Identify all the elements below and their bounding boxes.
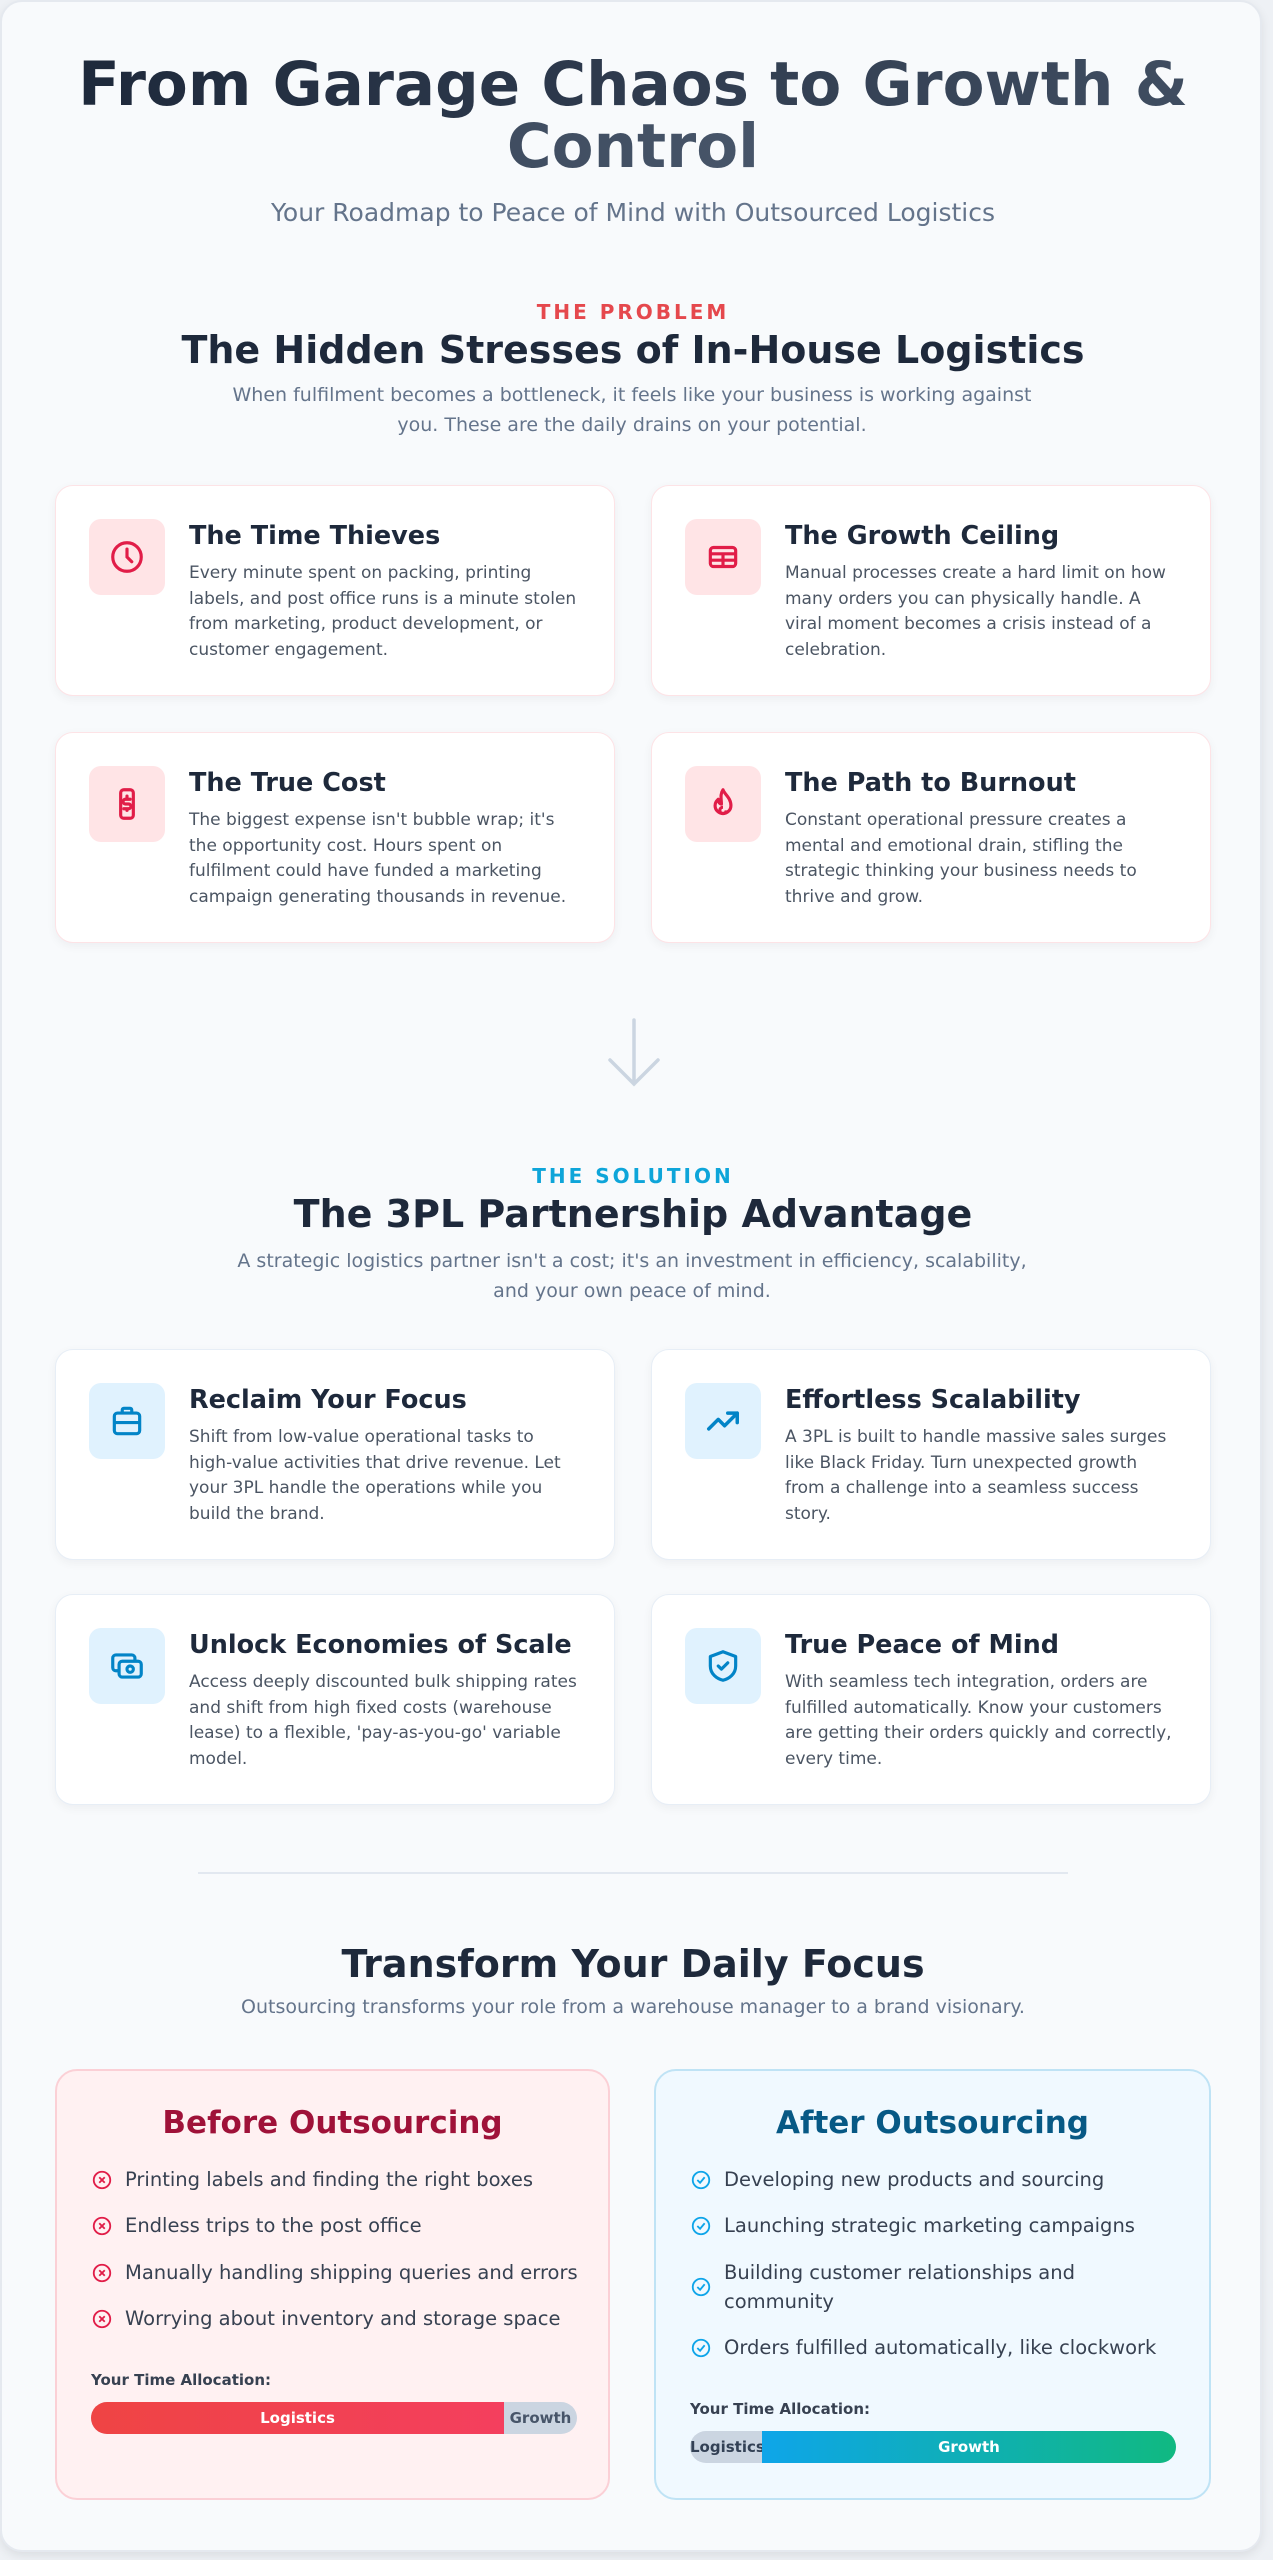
list item: Endless trips to the post office [125,2214,422,2237]
list item: Printing labels and finding the right boxes [125,2168,533,2191]
card: true cost [55,732,615,943]
bar: time allocation after: Logistics [690,2438,765,2456]
card: growth ceiling: The Growth Ceiling [785,521,1059,551]
list item: Building customer relationships and [724,2261,1075,2284]
card: burnout: Constant operational pressure creates a mental and emotional drain, stifling the strategic thinking your business needs to thrive and grow. [785,810,1137,906]
arrow down [608,1018,660,1086]
card: scalability [651,1349,1211,1560]
list item: community [724,2290,834,2313]
panel: before outsourcing: Before Outsourcing [162,2105,503,2141]
card: time thieves [55,485,615,696]
subtitle: Your Roadmap to Peace of Mind with Outsourced Logistics [271,198,995,227]
bar: time allocation before [91,2402,577,2434]
problem description: When fulfilment becomes a bottleneck, it feels like your business is working against you. These are the daily drains on your potential. [233,384,1031,436]
card: peace of mind: With seamless tech integration, orders are fulfilled automatically. Know your customers are getting their orders quickly and correctly, every time. [785,1672,1172,1768]
list item: Developing new products and sourcing [724,2168,1104,2191]
card: reclaim focus [55,1349,615,1560]
heading: solution: The 3PL Partnership Advantage [294,1192,972,1236]
list item [692,2261,1075,2313]
eyebrow: the solution: THE SOLUTION [532,1164,734,1188]
card: scalability: A 3PL is built to handle massive sales surges like Black Friday. Turn unexpected growth from a challenge into a seamless success story. [785,1427,1166,1524]
eyebrow: the problem: THE PROBLEM [537,300,729,324]
card: burnout [651,732,1211,943]
solution description: A strategic logistics partner isn't a cost; it's an investment in efficiency, scalability, and your own peace of mind. [237,1250,1027,1302]
card: economies of scale: Unlock Economies of Scale [189,1630,572,1660]
card: time thieves: Every minute spent on packing, printing labels, and post office runs is a minute stolen from marketing, product development, or customer engagement. [189,563,576,660]
list item: Launching strategic marketing campaigns [724,2214,1135,2237]
icon: clock [89,519,165,595]
icon: flame [685,766,761,842]
card: peace of mind [651,1594,1211,1805]
icon: money [89,766,165,842]
title [78,49,1188,182]
list item: Orders fulfilled automatically, like clockwork [724,2336,1156,2359]
panel: before outsourcing: Your Time Allocation: [91,2371,271,2389]
card: reclaim focus: Reclaim Your Focus [189,1385,467,1415]
card: growth ceiling: Manual processes create a hard limit on how many orders you can physically handle. A viral moment becomes a crisis instead of a celebration. [785,563,1166,660]
panel: after outsourcing [654,2069,1211,2500]
title: Control [507,111,759,182]
card: economies of scale [55,1594,615,1805]
bar: time allocation after: Growth [938,2438,1000,2456]
icon: cash [89,1628,165,1704]
card: time thieves: The Time Thieves [189,521,440,551]
list item: Worrying about inventory and storage space [125,2307,560,2330]
list item: Manually handling shipping queries and errors [125,2261,578,2284]
title: From Garage Chaos to Growth & [78,49,1188,120]
icon: shield check [685,1628,761,1704]
icon: briefcase [89,1383,165,1459]
icon: grid [685,519,761,595]
card: economies of scale: Access deeply discounted bulk shipping rates and shift from high fixed costs (warehouse lease) to a flexible, 'pay-as-you-go' variable model. [189,1672,577,1768]
card: scalability: Effortless Scalability [785,1385,1081,1415]
card: burnout: The Path to Burnout [785,768,1076,798]
card: growth ceiling [651,485,1211,696]
icon: trending up [685,1383,761,1459]
heading: transform: Transform Your Daily Focus [341,1942,925,1986]
panel: after outsourcing: Your Time Allocation: [690,2400,870,2418]
bar: time allocation after [690,2431,1176,2463]
heading: problem: The Hidden Stresses of In-House Logistics [181,328,1085,372]
panel: after outsourcing: After Outsourcing [776,2105,1089,2141]
card: true cost: The biggest expense isn't bubble wrap; it's the opportunity cost. Hours spent on fulfilment could have funded a marketing campaign generating thousands in revenue. [189,810,566,906]
card: true cost: The True Cost [189,768,386,798]
transform description: Outsourcing transforms your role from a warehouse manager to a brand visionary. [241,1996,1025,2018]
bar: time allocation before: Logistics [260,2409,335,2427]
card: peace of mind: True Peace of Mind [785,1630,1059,1660]
panel: before outsourcing [55,2069,610,2500]
card: reclaim focus: Shift from low-value operational tasks to high-value activities that drive revenue. Let your 3PL handle the operations while you build the brand. [189,1427,561,1524]
bar: time allocation before: Growth [510,2409,571,2427]
